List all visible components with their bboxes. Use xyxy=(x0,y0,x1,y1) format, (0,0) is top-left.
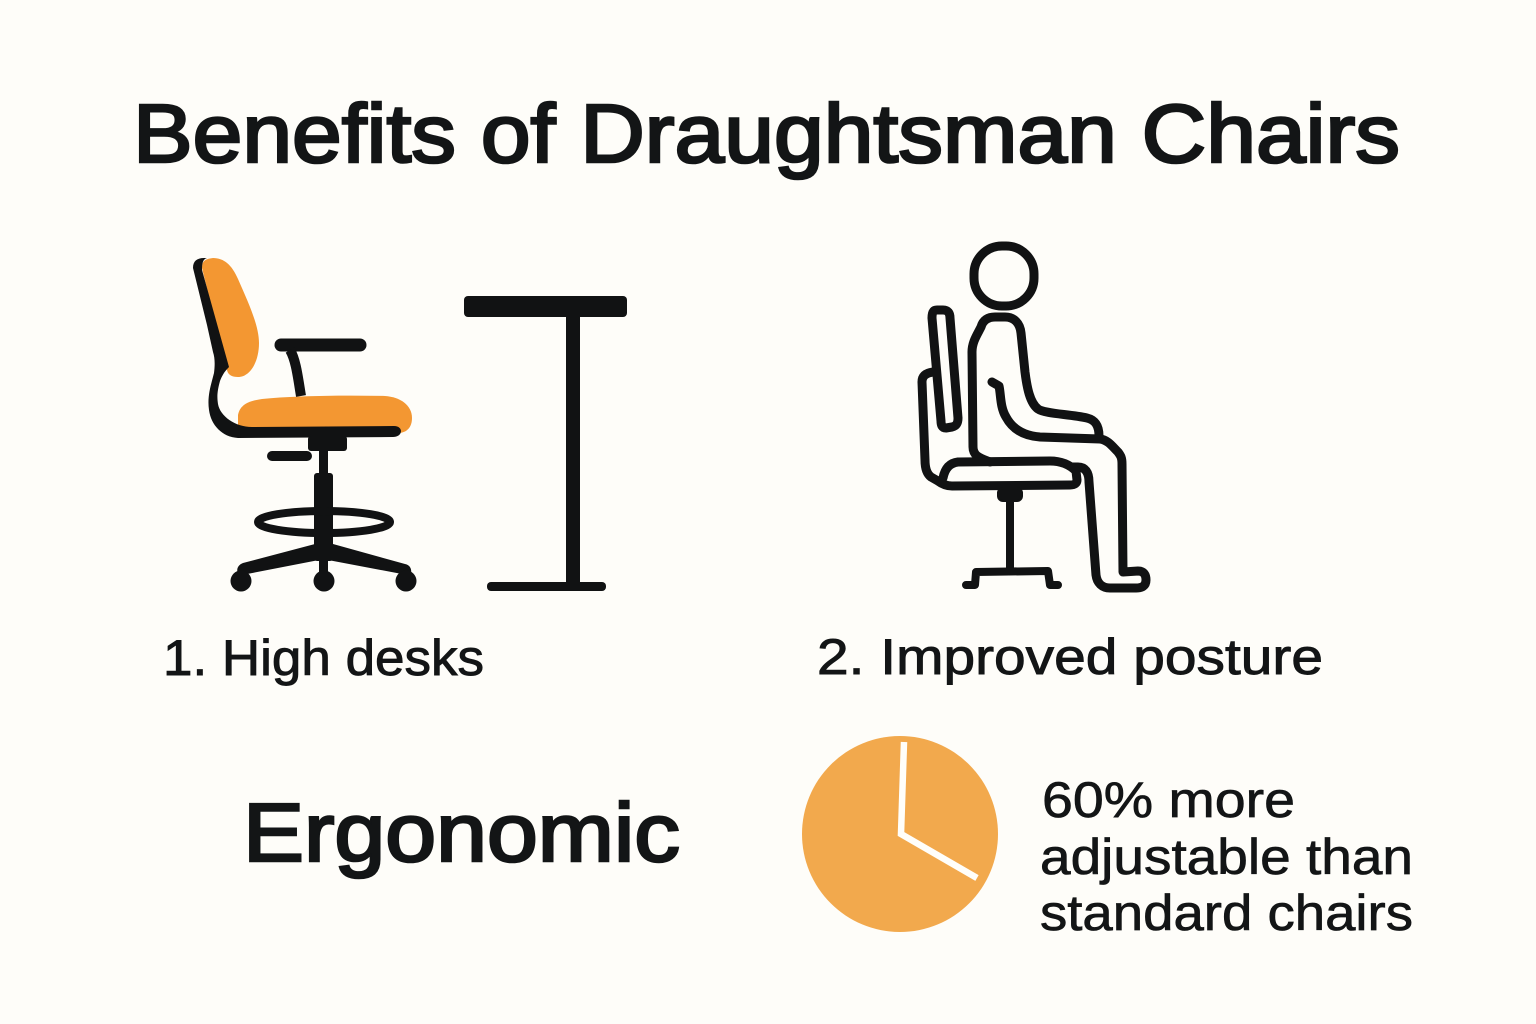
panel: improved posture xyxy=(817,246,1323,685)
title: Benefits of Draughtsman Chairs xyxy=(133,87,1400,180)
chair back frame and seat pan xyxy=(193,258,401,438)
chair feet xyxy=(966,571,1058,585)
callout: 60% more adjustable xyxy=(1040,772,1413,941)
icon: high desk xyxy=(464,296,627,591)
chair backrest xyxy=(932,310,958,428)
chair foot ring xyxy=(258,511,390,533)
chair five-star base and casters xyxy=(230,544,416,592)
chair armrest xyxy=(281,345,360,396)
icon: seated person on chair xyxy=(922,246,1146,588)
pie chart: 60% xyxy=(802,736,998,932)
chair height lever and hub xyxy=(267,436,347,461)
callout: 60% more adjustable: 60% more xyxy=(1042,772,1295,828)
person arm and lower leg xyxy=(992,382,1146,588)
label: improved posture: 2. Improved posture xyxy=(817,629,1323,685)
heading: ergonomic: Ergonomic xyxy=(243,786,680,879)
panel: high desks xyxy=(163,258,627,686)
chair seat and lower back xyxy=(922,372,1077,486)
person torso and thigh xyxy=(972,317,1099,462)
person head xyxy=(974,246,1034,306)
chair pedestal xyxy=(1006,495,1014,568)
callout: 60% more adjustable: adjustable than xyxy=(1040,829,1413,885)
icon: draughtsman chair xyxy=(193,258,416,592)
chair backrest cushion xyxy=(202,258,259,377)
label: high desks: 1. High desks xyxy=(163,630,484,686)
chair gas lift column xyxy=(314,450,333,578)
chair seat cushion xyxy=(238,396,412,433)
callout: 60% more adjustable: standard chairs xyxy=(1040,885,1413,941)
